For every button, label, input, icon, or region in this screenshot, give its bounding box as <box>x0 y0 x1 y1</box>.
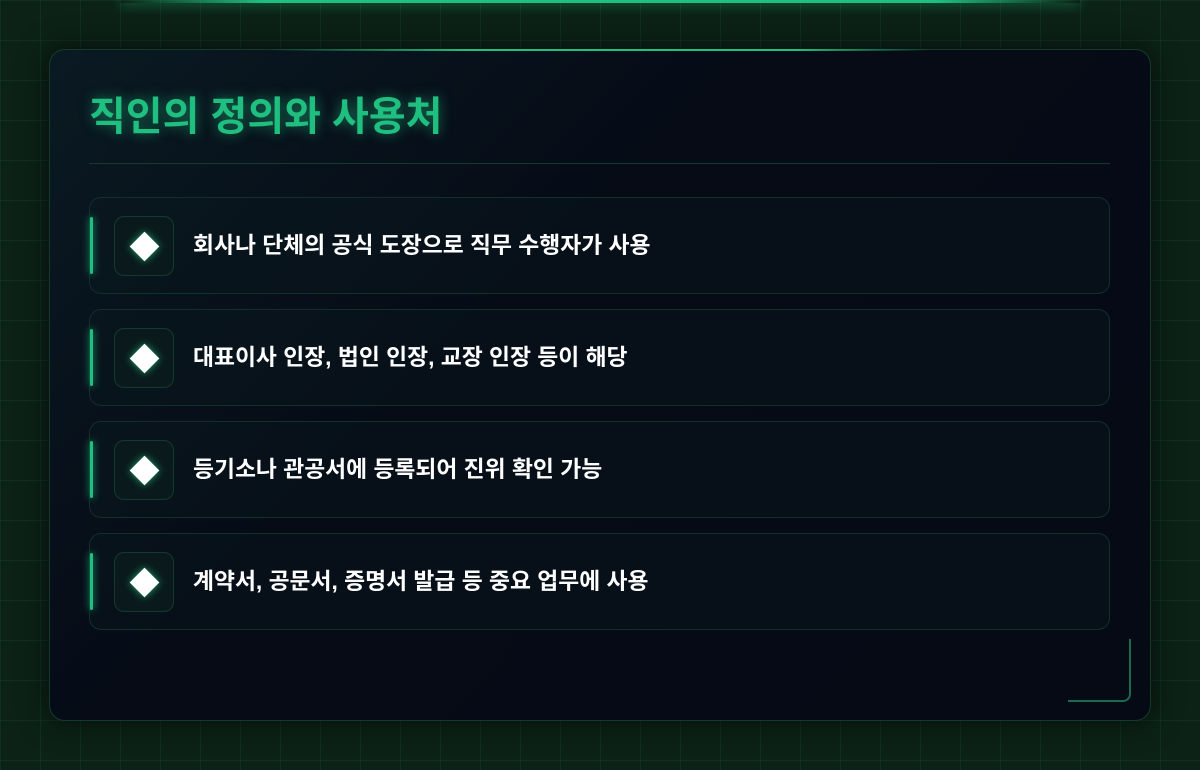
text 2: 대표이사 인장, 법인 인장, 교장 인장 등이 해당 <box>193 344 628 370</box>
item 4 <box>89 533 1110 630</box>
icon: diamond <box>114 216 174 276</box>
text 1: 회사나 단체의 공식 도장으로 직무 수행자가 사용 <box>193 232 650 258</box>
text 3: 등기소나 관공서에 등록되어 진위 확인 가능 <box>193 456 602 482</box>
text 4: 계약서, 공문서, 증명서 발급 등 중요 업무에 사용 <box>193 568 648 594</box>
icon: diamond <box>114 440 174 500</box>
item 2 <box>89 309 1110 406</box>
icon: diamond <box>114 328 174 388</box>
item 3 <box>89 421 1110 518</box>
icon: diamond <box>114 552 174 612</box>
item 1 <box>89 197 1110 294</box>
title: 직인의 정의와 사용처 <box>89 95 442 139</box>
corner bracket <box>1068 639 1131 702</box>
